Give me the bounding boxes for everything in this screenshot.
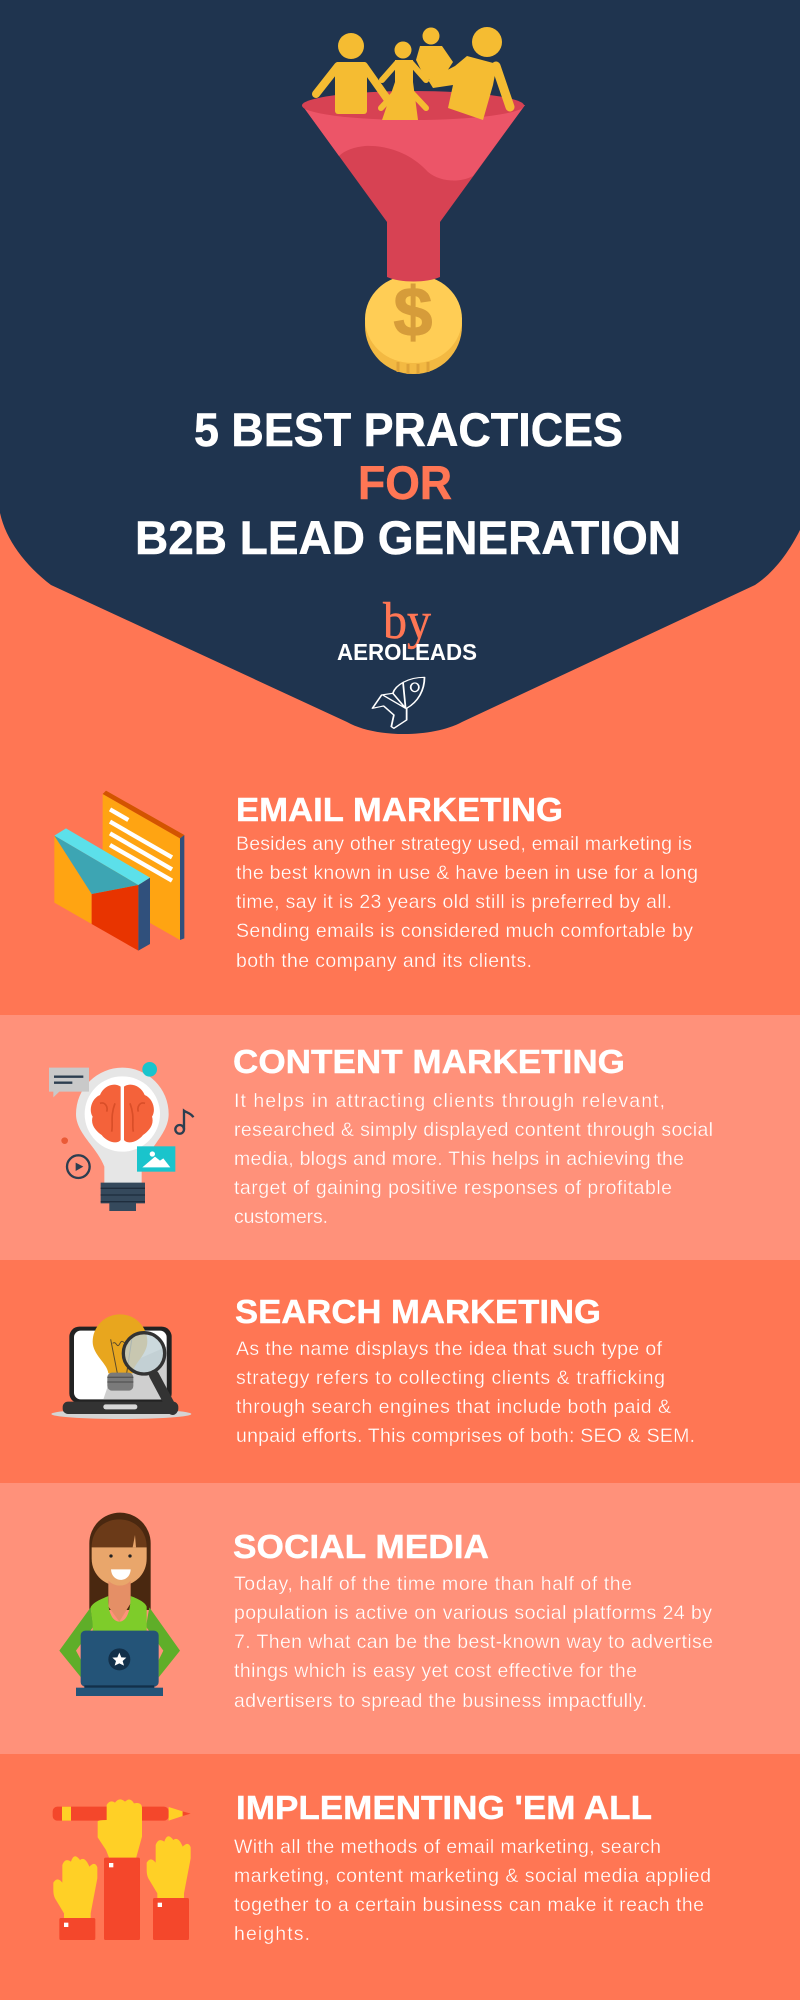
title: B2B LEAD GENERATION: [135, 511, 681, 564]
body text: advertisers to spread the business impactfully.: [234, 1690, 647, 1712]
panel: header: [0, 0, 800, 734]
body text: time, say it is 23 years old still is preferred by all.: [236, 891, 672, 913]
body text: population is active on various social platforms 24 by: [234, 1602, 712, 1624]
title: FOR: [358, 456, 452, 509]
body text: both the company and its clients.: [236, 950, 532, 972]
byline: by: [383, 593, 431, 650]
icon: rocket: [372, 677, 424, 728]
body text: It helps in attracting clients through relevant,: [234, 1090, 665, 1112]
body text: unpaid efforts. This comprises of both: SEO & SEM.: [236, 1425, 695, 1447]
byline: [337, 593, 477, 665]
body text: Besides any other strategy used, email marketing is: [236, 833, 692, 855]
body text: Today, half of the time more than half of the: [234, 1573, 632, 1595]
panel: search marketing: [0, 1260, 800, 1483]
body text: As the name displays the idea that such type of: [236, 1338, 663, 1360]
panel: content marketing: [0, 1015, 800, 1260]
body text: through search engines that include both paid &: [236, 1396, 671, 1418]
icon: coin: [365, 273, 462, 374]
icon: sales funnel with people and coin: [302, 27, 525, 374]
heading: SEARCH MARKETING: [235, 1293, 601, 1330]
icon: coin: $: [394, 273, 432, 351]
icon: raised hands and pencil: [53, 1799, 191, 1940]
body text: researched & simply displayed content through social: [234, 1119, 713, 1141]
body text: media, blogs and more. This helps in achieving the: [234, 1148, 684, 1170]
body text: things which is easy yet cost effective for the: [234, 1660, 637, 1682]
panel: email marketing: [0, 740, 800, 1015]
body text: 7. Then what can be the best-known way to advertise: [234, 1631, 713, 1653]
body text: marketing, content marketing & social media applied: [234, 1865, 711, 1887]
body text: [234, 1836, 711, 1945]
body text: the best known in use & have been in use for a long: [236, 862, 698, 884]
title: [135, 403, 681, 564]
heading: CONTENT MARKETING: [233, 1043, 625, 1080]
byline: AEROLEADS: [337, 639, 477, 665]
panel: implementing em all: [0, 1754, 800, 2000]
icon: funnel: [302, 91, 525, 282]
icon: light bulb with brain: [49, 1062, 193, 1211]
panel: social media: [0, 1483, 800, 1754]
body text: customers.: [234, 1206, 328, 1228]
heading: SOCIAL MEDIA: [233, 1528, 489, 1565]
title: 5 BEST PRACTICES: [194, 403, 623, 456]
body text: Sending emails is considered much comfortable by: [236, 920, 693, 942]
body text: together to a certain business can make it reach the: [234, 1894, 704, 1916]
icon: people: [316, 27, 510, 120]
body text: target of gaining positive responses of profitable: [234, 1177, 672, 1199]
body text: With all the methods of email marketing, search: [234, 1836, 661, 1858]
icon: laptop with bulb and magnifier: [51, 1314, 191, 1419]
body text: heights.: [234, 1923, 310, 1945]
heading: IMPLEMENTING 'EM ALL: [236, 1789, 652, 1826]
icon: woman with laptop: [59, 1513, 180, 1696]
body text: [234, 1573, 713, 1712]
body text: [236, 1338, 695, 1447]
body text: [234, 1090, 713, 1228]
heading: EMAIL MARKETING: [236, 791, 563, 828]
icon: envelope and letter: [54, 791, 184, 951]
body text: [236, 833, 698, 972]
body text: strategy refers to collecting clients & trafficking: [236, 1367, 665, 1389]
